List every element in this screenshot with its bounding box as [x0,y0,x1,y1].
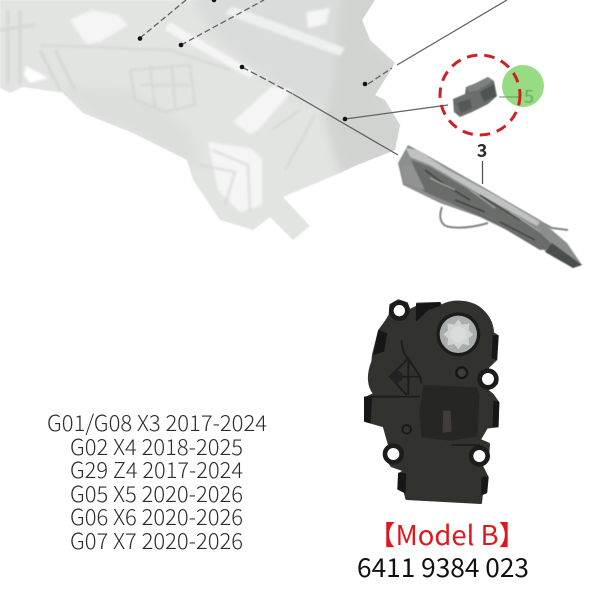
darker right end of housing [326,0,400,173]
compatibility list: G06 X6 2020-2026 [70,500,243,532]
compatibility list [47,406,267,556]
compatibility list: G02 X4 2018-2025 [70,430,243,462]
light highlights [24,6,345,212]
compatibility list: G01/G08 X3 2017-2024 [47,406,267,438]
mounting holes [385,303,496,464]
lower body shading [160,146,188,162]
small actuator icon in the diagram [453,77,497,117]
compatibility list: G29 Z4 2017-2024 [70,453,243,485]
part number 3 with leader [477,137,487,184]
compatibility list: G07 X7 2020-2026 [70,524,243,556]
product photo: black actuator Model B [364,301,499,503]
connector tabs [364,302,499,495]
ribs [372,340,480,445]
model label: 【Model B】 [368,514,526,553]
diagram: faded HVAC housing assembly [0,0,410,240]
heat exchanger part 3 [398,145,582,268]
green highlight circle with part number 5 [499,65,544,109]
actuator body [365,301,498,503]
red dashed circle callout [440,55,520,135]
part number 3 with leader: 3 [477,137,487,163]
part number: 6411 9384 023 [357,548,529,585]
leader lines with dots [138,0,507,155]
left ducts [0,10,75,90]
green highlight circle with part number 5: 5 [524,83,534,109]
darker upper centre band [194,0,332,98]
compatibility list: G05 X5 2020-2026 [70,477,243,509]
housing grid details [130,48,314,210]
raised motor housing [419,385,479,441]
small recessed bosses [456,367,467,378]
grey splined shaft socket [436,312,480,356]
